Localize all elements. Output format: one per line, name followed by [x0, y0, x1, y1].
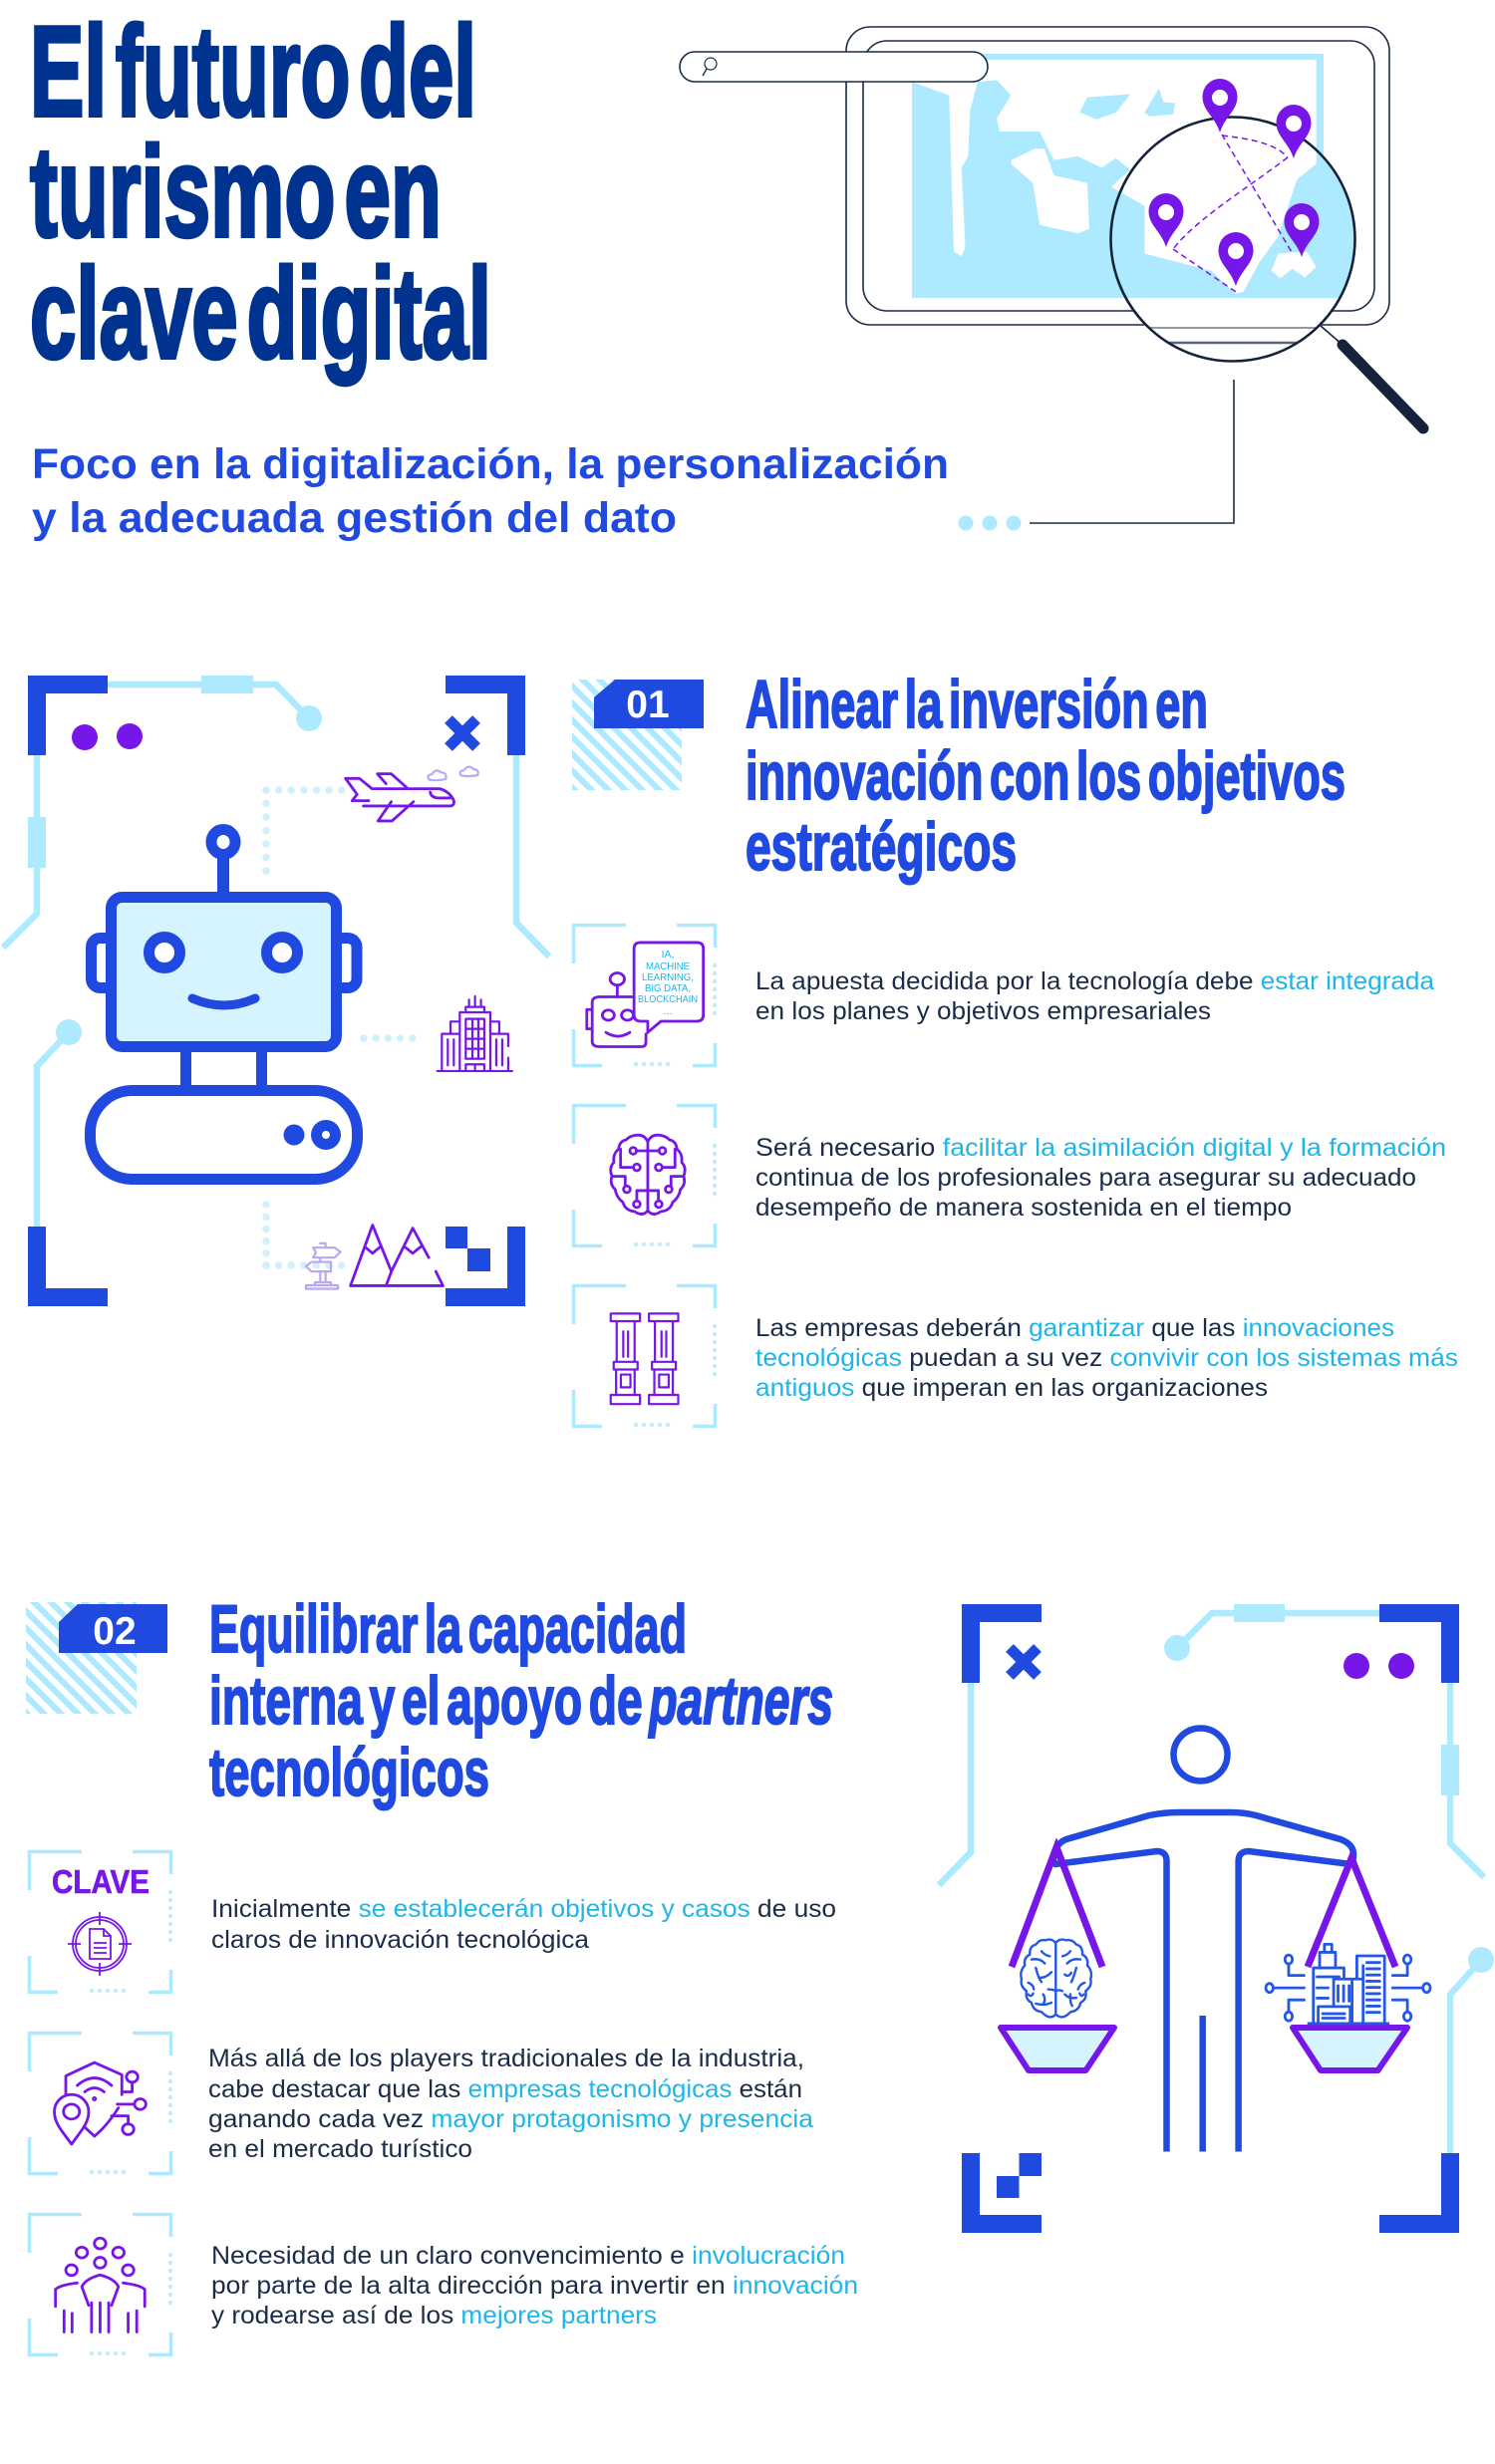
frame traces [3, 676, 549, 1227]
text block: 02-3: Necesidad de un claro convencimiento e involucración [211, 2242, 845, 2270]
subtitle: Foco en la digitalización, la personalización [32, 440, 949, 488]
target [68, 1912, 132, 1976]
pin 3 [1148, 193, 1184, 247]
bubble text: BIG DATA, [645, 982, 691, 994]
pin 2 [1276, 105, 1312, 158]
right scale [1293, 1858, 1407, 2070]
icon: signpost [306, 1243, 341, 1289]
section 02 badge [26, 1602, 167, 1714]
shield [55, 2062, 146, 2144]
frame [574, 1106, 716, 1245]
purple dots [1344, 1653, 1414, 1679]
text block: 01-1: La apuesta decidida por la tecnología debe estar integrada [755, 967, 1434, 995]
frame corners [28, 676, 525, 1306]
bubble text [638, 949, 698, 1017]
text block: 02-3: y rodearse así de los mejores partners [211, 2302, 657, 2329]
subtitle: y la adecuada gestión del dato [32, 494, 677, 542]
icon: x mark [1010, 1648, 1038, 1676]
antenna [211, 829, 235, 894]
figure: body [1053, 1812, 1353, 2152]
title: turismo en [30, 121, 442, 264]
brain [611, 1135, 685, 1215]
text block: 01-2: Será necesario facilitar la asimilación digital y la formación [755, 1134, 1446, 1162]
icon: columns [574, 1285, 716, 1427]
frame [30, 1851, 171, 1993]
text block: 01-2: continua de los profesionales para asegurar su adecuado [755, 1164, 1416, 1192]
people group [56, 2238, 145, 2332]
clave label: CLAVE [52, 1863, 150, 1900]
icon: x mark [448, 719, 476, 747]
text block: 02-2: ganando cada vez mayor protagonismo y presencia [208, 2105, 813, 2133]
smile [192, 998, 255, 1005]
tablet outline [846, 27, 1389, 325]
text block: 02-3: por parte de la alta dirección para invertir en innovación [211, 2272, 858, 2300]
bubble text: IA, [662, 949, 674, 960]
icon: plane [346, 767, 478, 821]
left scale [1001, 1847, 1114, 2070]
title: El futuro del [30, 0, 476, 143]
bubble text: ... [664, 1005, 672, 1017]
base [90, 1090, 357, 1180]
eyes [150, 937, 297, 968]
pin 5 [1284, 203, 1320, 257]
head [112, 897, 337, 1046]
illustration: tablet with map and magnifier [680, 27, 1423, 428]
heading: section 01 [746, 667, 1346, 885]
small robot and bubble [587, 943, 704, 1047]
map [912, 54, 1364, 363]
bubble text: MACHINE [646, 960, 690, 972]
text block: 01-2 [755, 1134, 1446, 1222]
purple dots [72, 723, 143, 750]
frame [30, 2214, 171, 2355]
text block: 01-1: en los planes y objetivos empresariales [755, 997, 1211, 1025]
section 01 badge [572, 680, 704, 790]
panel: balance illustration [939, 1604, 1494, 2233]
heading: section 01: Alinear la inversión en [746, 667, 1208, 742]
text block: 01-3: antiguos que imperan en las organizaciones [755, 1374, 1268, 1402]
title: clave digital [30, 242, 491, 386]
frame [30, 2033, 171, 2174]
icon: city circuit [1266, 1944, 1430, 2024]
icon: brain [1021, 1940, 1091, 2017]
heading: section 02: tecnológicos [209, 1735, 489, 1810]
icon: shield network [30, 2033, 171, 2174]
icon: robot with speech bubble [574, 925, 716, 1066]
frame [574, 1285, 716, 1427]
bubble text: BLOCKCHAIN [638, 993, 698, 1005]
pin 1 [1202, 79, 1238, 133]
frame corners [962, 1604, 1459, 2233]
dashed routes [1173, 135, 1292, 292]
search bar [680, 52, 988, 82]
map pins [1148, 79, 1320, 286]
robot [90, 829, 357, 1180]
text block: 02-1: claros de innovación tecnológica [211, 1926, 589, 1954]
pin 4 [1218, 232, 1254, 286]
connector with dots [959, 380, 1234, 530]
icon: building [438, 996, 512, 1071]
text block: 02-3 [211, 2242, 858, 2329]
ears [92, 939, 357, 988]
text block: 02-2 [208, 2045, 813, 2163]
icon: brain circuit [574, 1106, 716, 1245]
frame [574, 925, 716, 1066]
text block: 02-2: Más allá de los players tradicionales de la industria, [208, 2045, 804, 2072]
heading: section 02: Equilibrar la capacidad [209, 1591, 687, 1667]
subtitle [32, 440, 949, 542]
text block: 01-1 [755, 967, 1434, 1025]
heading: section 01: estratégicos [746, 809, 1017, 885]
section 02 badge: 02 [93, 1610, 137, 1653]
bubble text: LEARNING, [642, 971, 694, 983]
magnifier handle [1321, 326, 1423, 428]
magnifier lens [1110, 118, 1355, 361]
text block: 02-1 [211, 1895, 836, 1954]
text block: 02-1: Inicialmente se establecerán objetivos y casos de uso [211, 1895, 836, 1923]
heading: section 02 [209, 1591, 833, 1810]
text block: 02-2: en el mercado turístico [208, 2135, 472, 2163]
icon: people [30, 2214, 171, 2355]
text block: 01-3: Las empresas deberán garantizar que las innovaciones [755, 1314, 1394, 1342]
columns [611, 1313, 678, 1404]
figure: head [1174, 1728, 1228, 1781]
panel: robot illustration [3, 676, 549, 1306]
text block: 02-2: cabe destacar que las empresas tecnológicas están [208, 2075, 802, 2103]
icon: clave target [30, 1851, 171, 1993]
icon: mountains [351, 1226, 443, 1285]
frame traces [939, 1604, 1494, 2153]
neck [180, 1046, 267, 1090]
heading: section 02: interna y el apoyo de partners [209, 1663, 833, 1739]
title [30, 0, 491, 386]
section 01 badge: 01 [626, 684, 670, 726]
dotted connectors [266, 790, 414, 1266]
text block: 01-3 [755, 1314, 1458, 1402]
text block: 01-2: desempeño de manera sostenida en el tiempo [755, 1194, 1292, 1222]
base lights [283, 1120, 341, 1150]
text block: 01-3: tecnológicas puedan a su vez convivir con los sistemas más [755, 1344, 1458, 1372]
